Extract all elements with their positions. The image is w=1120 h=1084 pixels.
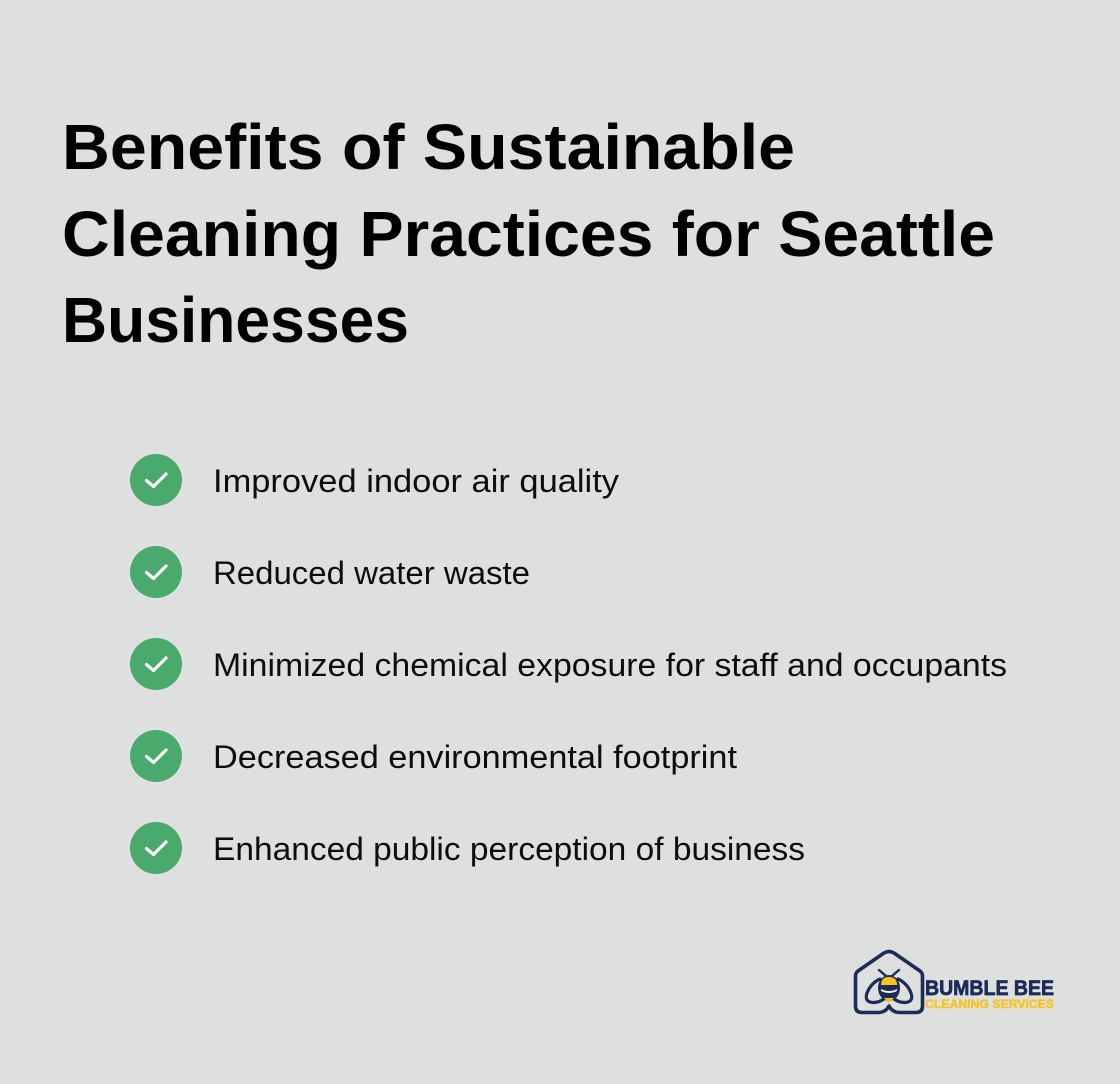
bee body	[878, 975, 900, 1001]
icon: house with bee	[856, 952, 922, 1012]
title: Businesses	[62, 284, 409, 356]
item: public perception	[130, 822, 805, 874]
item: environmental footprint: Decreased environmental footprint	[213, 739, 737, 775]
item: public perception: Enhanced public perception of business	[213, 831, 805, 867]
title	[62, 111, 995, 356]
item: chemical exposure	[130, 638, 1007, 690]
item: water waste: Reduced water waste	[213, 555, 530, 591]
logo: Bumble Bee Cleaning Services: CLEANING SERVICES	[925, 997, 1054, 1011]
item: environmental footprint	[130, 730, 737, 782]
title: Benefits of Sustainable	[62, 111, 795, 183]
checklist	[130, 454, 1007, 874]
logo: Bumble Bee Cleaning Services	[856, 952, 1054, 1012]
item: indoor air quality	[130, 454, 619, 506]
title: Cleaning Practices for Seattle	[62, 198, 995, 270]
item: indoor air quality: Improved indoor air quality	[213, 463, 619, 499]
item: chemical exposure: Minimized chemical exposure for staff and occupants	[213, 647, 1007, 683]
logo text: BUMBLE BEE	[925, 977, 1054, 1000]
item: water waste	[130, 546, 530, 598]
